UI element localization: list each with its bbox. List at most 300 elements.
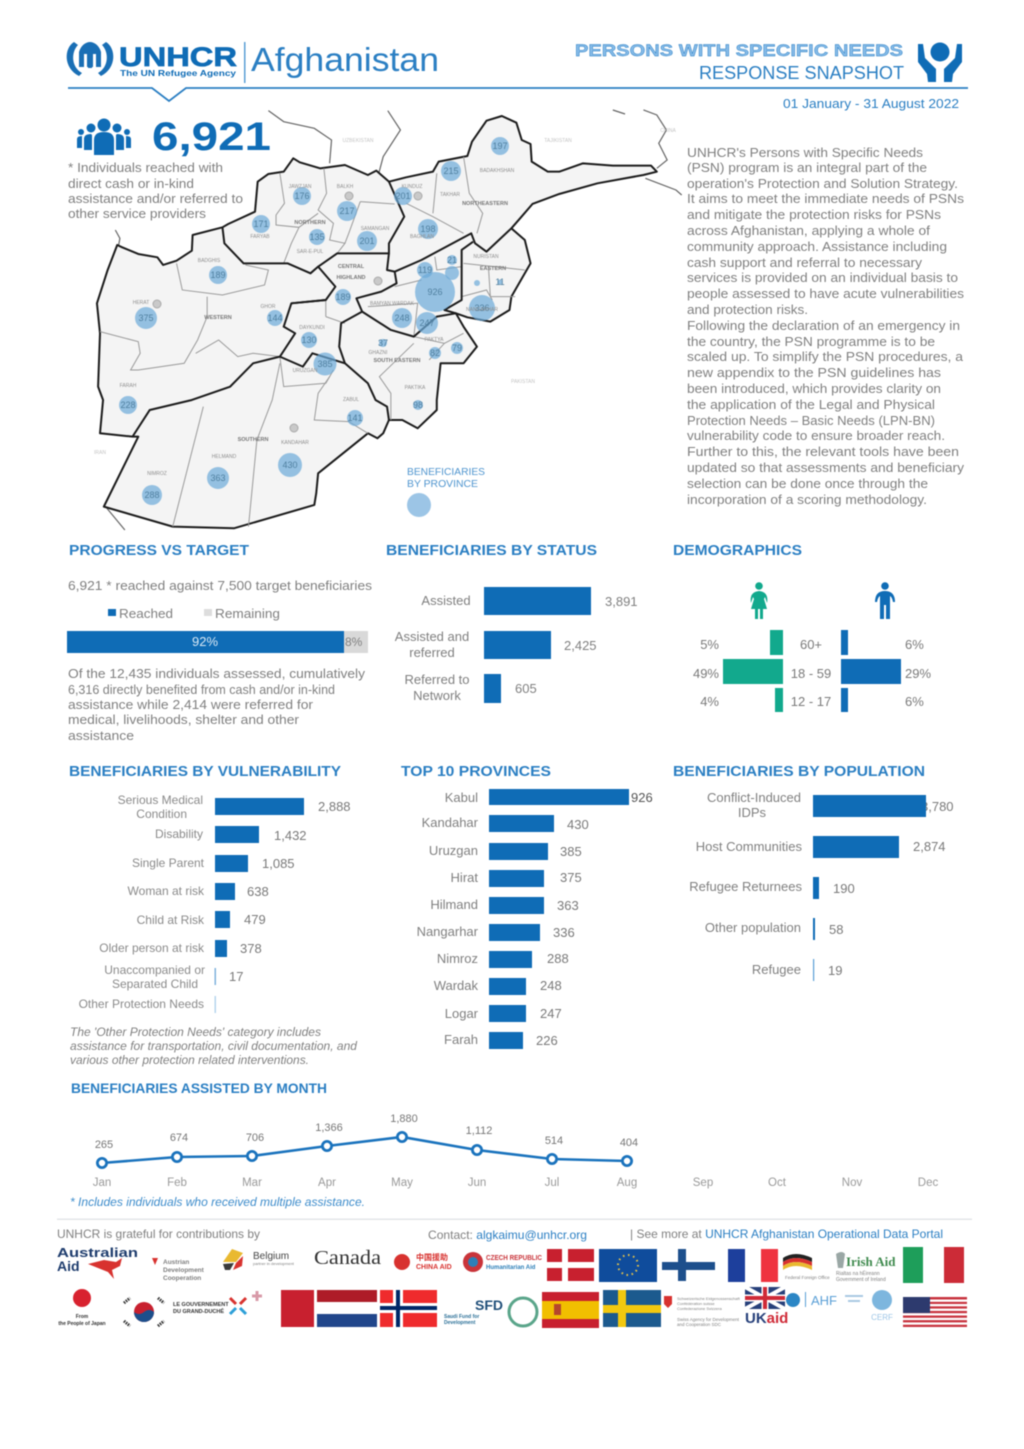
map legend: [407, 466, 485, 517]
month axis: Apr: [318, 1177, 336, 1189]
assessment note: [68, 666, 366, 743]
bubble values: 130: [301, 335, 317, 345]
logo: Saudi Fund for Development: Development: [444, 1320, 476, 1326]
icon: hands holding person: [918, 42, 962, 82]
category labels: Condition: [136, 807, 187, 821]
region boundaries: [133, 182, 511, 437]
bubble values: 215: [443, 166, 459, 176]
flag: Norway: [380, 1290, 437, 1327]
province labels: DAYKUNDI: [299, 325, 325, 331]
heading: TOP 10 PROVINCES: [401, 764, 551, 780]
narrative text: scaled up. To simplify the PSN procedures, a: [687, 349, 964, 364]
beneficiary bubbles: [119, 137, 509, 505]
bubble values: 201: [359, 236, 375, 246]
heading: PROGRESS VS TARGET: [69, 543, 249, 559]
logo: Saudi Fund for Development: Saudi Fund for: [444, 1314, 479, 1320]
logo: Australian Aid: [57, 1245, 138, 1279]
percentages: 49%: [693, 666, 719, 681]
footnote: * Includes individuals who received multiple assistance.: [70, 1197, 365, 1209]
flag: Sweden: [603, 1290, 661, 1327]
flag: Korea: [124, 1298, 164, 1326]
donor logos: [57, 1245, 967, 1328]
bars: [484, 587, 591, 615]
province labels: GHOR: [260, 304, 276, 310]
percentages: 6%: [905, 637, 924, 652]
logo: Austrian Development Cooperation: Austrian: [163, 1259, 189, 1266]
region labels: [204, 201, 508, 443]
values: 2,888: [318, 799, 351, 814]
values: 375: [560, 870, 582, 885]
report title: [575, 41, 904, 83]
headline caption: * Individuals reached with: [68, 160, 223, 175]
province names: Hirat: [451, 870, 478, 885]
logo: Luxembourg: DU GRAND-DUCHÉ: [173, 1307, 224, 1315]
headline caption: [68, 160, 243, 221]
country title: Afghanistan: [251, 41, 439, 78]
logo: Luxembourg: LE GOUVERNEMENT: [173, 1302, 229, 1308]
values: 430: [567, 817, 589, 832]
neighbouring country labels: UZBEKISTAN: [342, 138, 374, 144]
logo: Irish Aid: Government of Ireland: [836, 1277, 886, 1283]
bubble values: 141: [347, 413, 363, 423]
icon: UNHCR emblem: [67, 42, 113, 76]
province names: Nimroz: [437, 951, 478, 966]
data portal: | See more at UNHCR Afghanistan Operational Data Portal: [630, 1227, 943, 1241]
flag: Denmark: [547, 1249, 594, 1281]
month axis: [93, 1177, 938, 1189]
assessment note: assistance: [68, 728, 134, 743]
category labels: Separated Child: [112, 977, 198, 991]
logo: Czech Republic: [463, 1252, 542, 1272]
category labels: Child at Risk: [137, 913, 205, 927]
logo: Irish Aid: [836, 1252, 896, 1283]
heading: BENEFICIARIES ASSISTED BY MONTH: [71, 1080, 327, 1096]
logo: Afghanistan Humanitarian Fund: [786, 1292, 863, 1308]
narrative text: been introduced, which provides clarity on: [687, 381, 941, 396]
logo: Afghanistan Humanitarian Fund: AHF: [811, 1293, 837, 1308]
province labels: BADGHIS: [198, 258, 221, 264]
category labels: [79, 793, 205, 1011]
snapshot subtitle: RESPONSE SNAPSHOT: [699, 63, 904, 83]
logo: Switzerland: and Cooperation SDC: [677, 1322, 722, 1327]
progress bar: 92%: [192, 634, 218, 649]
province boundaries: [100, 157, 525, 527]
category labels: Woman at risk: [128, 884, 205, 898]
legend: Remaining: [215, 606, 280, 621]
narrative text: new appendix to the PSN guidelines has: [687, 365, 942, 380]
province names: Wardak: [434, 978, 478, 993]
bubble values: 385: [317, 359, 333, 369]
icon: female: [751, 582, 767, 619]
bubble values: 248: [394, 313, 410, 323]
values: 363: [557, 898, 579, 913]
panel: beneficiaries by population: [673, 764, 954, 981]
bubble values: 11: [495, 277, 505, 287]
assessment note: medical, livelihoods, shelter and other: [68, 712, 300, 727]
region labels: CENTRAL: [338, 264, 365, 270]
province labels: TAKHAR: [440, 192, 460, 198]
province labels: [120, 168, 515, 477]
flag: France: [728, 1249, 778, 1282]
panel: demographics: [673, 543, 931, 712]
values: 1,085: [262, 856, 295, 871]
narrative text: Further to this, the relevant tools have been: [687, 444, 959, 459]
narrative text: vulnerability code to ensure broader reach.: [687, 428, 945, 443]
logo: Austrian Development Cooperation: Development: [163, 1267, 205, 1274]
values: 479: [244, 912, 266, 927]
logo: Japan: [58, 1289, 106, 1327]
panel: progress vs target: [67, 543, 373, 743]
values: 638: [247, 884, 269, 899]
bars: [489, 789, 629, 1049]
province labels: NANGARHAR: [466, 307, 498, 313]
neighbouring country labels: IRAN: [94, 450, 106, 456]
age labels: 12 - 17: [791, 694, 831, 709]
neighbouring country labels: CHINA: [660, 128, 676, 134]
logo: Irish Aid: Rialtas na hÉireann: [836, 1270, 880, 1277]
province names: Hilmand: [430, 897, 478, 912]
bubble values: 217: [339, 206, 355, 216]
bubble values: 176: [294, 191, 310, 201]
bubble values: 363: [210, 473, 226, 483]
narrative text: It aims to meet the immediate needs of PSNs: [687, 191, 965, 206]
neighbouring country labels: [94, 128, 676, 456]
labels and values: 2,425: [564, 638, 597, 653]
logo: Germany: [783, 1254, 830, 1280]
grey office markers: [153, 192, 422, 432]
bubble values: 189: [210, 270, 226, 280]
age labels: 18 - 59: [791, 666, 831, 681]
icon: male: [875, 582, 895, 619]
logo: Switzerland: Swiss Agency for Development: [677, 1317, 740, 1322]
province labels: BAGHLAN: [410, 234, 434, 240]
bubble values: 119: [418, 265, 432, 275]
population labels: Refugee Returnees: [689, 879, 802, 894]
logo: Switzerland: Schweizerische Eidgenossenschaft: [677, 1296, 741, 1301]
province labels: KUNDUZ: [402, 184, 422, 190]
values: 1,432: [274, 828, 307, 843]
logo: China Aid: 中国援助: [416, 1252, 448, 1263]
narrative text: Protection Needs – Basic Needs (LPN-BN): [687, 413, 935, 428]
assessment note: assistance while 2,414 were referred for: [68, 697, 314, 712]
progress bar: [67, 631, 368, 653]
values: 385: [560, 844, 582, 859]
headline caption: other service providers: [68, 206, 207, 221]
month axis: Jan: [93, 1177, 111, 1189]
narrative text: services is provided on an individual basis to: [687, 270, 958, 285]
province names: [417, 790, 479, 1047]
category note: assistance for transportation, civil documentation, and: [70, 1041, 358, 1053]
age labels: 60+: [800, 637, 822, 652]
bubble values: 288: [144, 490, 160, 500]
date range: 01 January - 31 August 2022: [783, 96, 959, 111]
category labels: Unaccompanied or: [104, 963, 205, 977]
heading: DEMOGRAPHICS: [673, 543, 802, 559]
province names: Kandahar: [422, 815, 479, 830]
male bars: [841, 630, 901, 712]
province labels: HERAT: [133, 300, 149, 306]
province labels: GHAZNI: [369, 350, 387, 356]
heading: BENEFICIARIES BY POPULATION: [673, 764, 925, 780]
labels and values: 605: [515, 681, 537, 696]
month axis: Nov: [842, 1177, 862, 1189]
population labels: Refugee: [752, 962, 801, 977]
country and province polygons: [97, 116, 657, 528]
bubble values: 79: [452, 343, 462, 353]
footer: contributions, contact and portal: [57, 1227, 943, 1242]
logo: Switzerland: [664, 1296, 741, 1327]
category labels: Older person at risk: [99, 941, 205, 955]
logo: Germany: Federal Foreign Office: [785, 1275, 830, 1280]
province labels: BALKH: [337, 184, 354, 190]
bubble values: 201: [395, 191, 411, 201]
headline caption: assistance and/or referred to: [68, 191, 243, 206]
flag: Finland: [662, 1249, 715, 1281]
headline caption: direct cash or in-kind: [68, 176, 194, 191]
logo: CERF: [871, 1290, 893, 1322]
flag: European Union: [599, 1249, 657, 1282]
province labels: SAMANGAN: [361, 226, 390, 232]
values: [828, 799, 954, 978]
values: 378: [240, 941, 262, 956]
narrative text: [687, 145, 965, 507]
region labels: SOUTH EASTERN: [373, 358, 421, 364]
month axis: Feb: [167, 1177, 187, 1189]
province labels: HELMAND: [212, 454, 237, 460]
bubble values: 82: [430, 348, 440, 358]
bubble values: 247: [419, 318, 435, 328]
logo: Saudi Fund for Development: SFD: [475, 1297, 503, 1313]
month axis: Dec: [918, 1177, 938, 1189]
logo: Luxembourg: [173, 1291, 262, 1315]
region labels: NORTHEASTERN: [462, 201, 508, 207]
narrative text: people assessed to have acute vulnerabilities: [687, 286, 965, 301]
bubble values: 171: [253, 219, 269, 229]
logo: Japan: the People of Japan: [58, 1321, 106, 1327]
bubble values: 375: [138, 313, 154, 323]
header rule with chevron: [68, 88, 968, 101]
contact: Contact: algkaimu@unhcr.org: [428, 1228, 587, 1242]
icon: group of people: [77, 118, 131, 155]
bubble values: 189: [335, 292, 351, 302]
province labels: KANDAHAR: [281, 440, 309, 446]
values: 2,874: [913, 839, 946, 854]
province labels: ZABUL: [343, 397, 359, 403]
month axis: May: [391, 1177, 413, 1189]
monthly values: 265: [95, 1139, 113, 1151]
region labels: WESTERN: [204, 315, 232, 321]
logo: Switzerland: Confederazione Svizzera: [677, 1306, 722, 1311]
province labels: PAKTIKA: [405, 385, 426, 391]
narrative text: and protection risks.: [687, 302, 808, 317]
bubble values: 336: [474, 303, 490, 313]
age labels: [791, 637, 831, 709]
narrative text: updated so that assessments and beneficiary: [687, 460, 965, 475]
logo: Belgium: partner in development: [253, 1261, 295, 1266]
province labels: SAR-E-PUL: [297, 249, 324, 255]
panel: beneficiaries assisted by month: [70, 1080, 938, 1209]
monthly values: [95, 1113, 638, 1151]
divider: [244, 42, 246, 83]
category labels: Other Protection Needs: [79, 997, 204, 1011]
female bars: [723, 630, 783, 712]
headline number: 6,921: [152, 115, 271, 159]
bubble values: 197: [492, 141, 508, 151]
narrative text: Following the declaration of an emergency in: [687, 318, 960, 333]
province labels: NURISTAN: [473, 254, 499, 260]
bubble values: 37: [378, 338, 388, 348]
labels and values: referred: [409, 645, 455, 660]
category labels: Serious Medical: [118, 793, 203, 807]
footer rule: [57, 1218, 972, 1220]
bubble values: 430: [282, 460, 298, 470]
monthly values: 1,366: [315, 1122, 343, 1134]
logo: Saudi Fund for Development: [444, 1297, 537, 1326]
logo: Czech Republic: CZECH REPUBLIC: [486, 1255, 542, 1262]
logo: Belgium: [223, 1249, 295, 1270]
category labels: Disability: [155, 827, 203, 841]
logo: UK aid: [745, 1287, 788, 1327]
logo: China Aid: CHINA AID: [416, 1264, 452, 1271]
percentages: 6%: [905, 694, 924, 709]
logo: Czech Republic: Humanitarian Aid: [486, 1265, 536, 1271]
percentages: 29%: [905, 666, 931, 681]
values: [229, 799, 351, 984]
logo wordmark: UNHCR: [119, 42, 237, 72]
bars: [813, 795, 926, 981]
region labels: SOUTHERN: [238, 437, 268, 443]
logo tagline: The UN Refugee Agency: [120, 68, 236, 78]
province labels: BADAKHSHAN: [480, 168, 515, 174]
labels and values: Network: [413, 688, 461, 703]
narrative text: operation's Protection and Solution Strategy.: [687, 176, 958, 191]
panel: beneficiaries by status: [386, 543, 638, 703]
logo: CERF: CERF: [871, 1313, 893, 1322]
logo: Australian Aid: Aid: [57, 1258, 80, 1274]
map legend: BENEFICIARIES: [407, 466, 485, 478]
population labels: Other population: [705, 920, 801, 935]
region labels: HIGHLAND: [336, 275, 366, 281]
target summary: 6,921 * reached against 7,500 target beneficiaries: [68, 578, 373, 593]
values: 247: [540, 1006, 562, 1021]
month axis: Jun: [468, 1177, 486, 1189]
programme title: PERSONS WITH SPECIFIC NEEDS: [575, 41, 903, 60]
narrative text: and mitigate the protection risks for PSNs: [687, 207, 942, 222]
heading: BENEFICIARIES BY VULNERABILITY: [69, 764, 341, 780]
province labels: BAMYAN WARDAK: [370, 301, 415, 307]
month axis: Oct: [768, 1177, 787, 1189]
neighbouring country labels: TAJIKISTAN: [544, 138, 572, 144]
logo: Irish Aid: Irish Aid: [846, 1254, 896, 1269]
flag: Spain: [542, 1292, 599, 1328]
values: 248: [540, 978, 562, 993]
province names: Farah: [444, 1032, 478, 1047]
labels and values: [395, 593, 638, 703]
labels and values: Assisted and: [395, 629, 469, 644]
assessment note: 6,316 directly benefited from cash and/or in-kind: [68, 682, 335, 697]
category note: [70, 1027, 358, 1067]
province labels: URUZGAN: [293, 368, 318, 374]
bubble values: [120, 141, 508, 500]
header: logo and country title: [67, 41, 439, 83]
percentages: 5%: [700, 637, 719, 652]
flag: United States: [903, 1297, 967, 1327]
logo: UK aid: UKaid: [745, 1310, 788, 1327]
monthly values: 674: [170, 1132, 188, 1144]
values: 336: [553, 925, 575, 940]
narrative text: the country, the PSN programme is to be: [687, 334, 935, 349]
month axis: Sep: [693, 1177, 713, 1189]
monthly values: 706: [246, 1132, 264, 1144]
category note: The 'Other Protection Needs' category includes: [70, 1027, 321, 1039]
month axis: Jul: [545, 1177, 559, 1189]
narrative text: community approach. Assistance including: [687, 239, 947, 254]
province names: Logar: [445, 1006, 479, 1021]
percentages: 4%: [700, 694, 719, 709]
population labels: [689, 790, 802, 977]
heading: BENEFICIARIES BY STATUS: [386, 543, 597, 559]
narrative text: (PSN) program is an integral part of the: [687, 160, 927, 175]
population labels: Conflict-Induced: [707, 790, 801, 805]
monthly values: 514: [545, 1135, 563, 1147]
legend: Reached: [119, 606, 173, 621]
values: 19: [828, 963, 842, 978]
monthly values: 1,880: [390, 1113, 418, 1125]
values: 58: [829, 922, 843, 937]
province labels: NIMROZ: [147, 471, 167, 477]
province labels: PAKTYA: [424, 337, 444, 343]
bubble values: 198: [420, 224, 436, 234]
flag: Italy: [903, 1247, 964, 1283]
percentages: [693, 637, 931, 709]
bubble values: 98: [413, 400, 423, 410]
logo: Canada: Canada: [314, 1247, 381, 1269]
values: 17: [229, 969, 243, 984]
population labels: Host Communities: [696, 839, 802, 854]
province labels: FARAH: [120, 383, 137, 389]
legend: [108, 606, 280, 621]
progress bar: 8%: [345, 635, 363, 649]
logo: Austrian Development Cooperation: Cooperation: [163, 1275, 201, 1282]
province names: Kabul: [445, 790, 478, 805]
narrative text: selection can be done once through the: [687, 476, 928, 491]
panel: top 10 provinces: [401, 764, 653, 1049]
bubble values: 228: [120, 400, 136, 410]
flag: Netherlands: [317, 1290, 377, 1327]
flag: red panel: [281, 1290, 314, 1327]
values: 190: [833, 881, 855, 896]
logo: China Aid: [394, 1252, 452, 1271]
bubble values: 21: [447, 255, 457, 265]
values: 226: [536, 1033, 558, 1048]
monthly values: 404: [620, 1137, 638, 1149]
logo: Belgium: Belgium: [253, 1251, 289, 1262]
bubble values: 926: [427, 287, 443, 297]
narrative text: across Afghanistan, applying a whole of: [687, 223, 930, 238]
neighbouring country borders: [107, 110, 682, 530]
province labels: JAWZJAN: [289, 184, 312, 190]
map legend: BY PROVINCE: [407, 478, 478, 490]
category note: various other protection related interventions.: [70, 1055, 309, 1067]
neighbouring country labels: PAKISTAN: [511, 379, 535, 385]
bubble values: 135: [309, 232, 325, 242]
bars: [214, 798, 304, 1013]
region labels: NORTHERN: [294, 220, 326, 226]
narrative text: UNHCR's Persons with Specific Needs: [687, 145, 924, 160]
logo: Austrian Development Cooperation: [152, 1258, 205, 1282]
values: [536, 790, 653, 1048]
narrative text: the application of the Legal and Physical: [687, 397, 935, 412]
